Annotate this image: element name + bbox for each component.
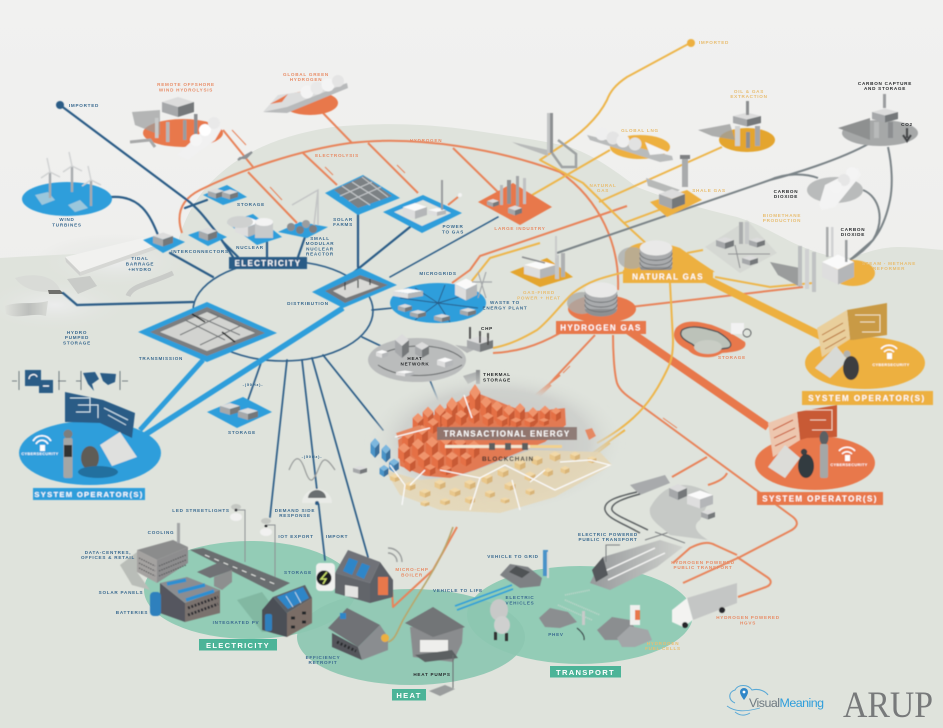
label: demand side response: RESPONSE [279, 513, 311, 518]
operator standing [64, 430, 72, 478]
orange system operator label: SYSTEM OPERATOR(S) [762, 494, 878, 504]
interconnector two [188, 228, 227, 246]
label: small modular nuclear reactor: NUCLEAR [306, 246, 334, 251]
label: imported gas: IMPORTED [699, 40, 729, 45]
label: natural gas pipe: NATURAL [589, 183, 617, 188]
label: electrolysis: ELECTROLYSIS [315, 153, 359, 158]
lower storage [207, 397, 272, 428]
label: carbon dioxide right: DIOXIDE [841, 232, 865, 237]
small marine turbine [238, 152, 252, 160]
label: storage: STORAGE [237, 202, 265, 207]
tower and pipeline [512, 113, 576, 167]
carbon dioxide ship [807, 167, 863, 210]
streetlight one [230, 504, 245, 562]
label: hydrogen storage: STORAGE [718, 355, 746, 360]
label: power to gas: POWER [442, 224, 464, 229]
teal zone: electricity [144, 541, 356, 639]
network: hydrogen lines [179, 113, 803, 607]
solar building [150, 562, 233, 622]
label: lower storage: STORAGE [228, 430, 256, 435]
label: gas fired power: POWER + HEAT [517, 295, 561, 300]
label: vehicle to life: VEHICLE TO LIFE [433, 588, 483, 593]
panel: orange system operator [755, 405, 875, 490]
hydrogen storage pond [674, 322, 751, 357]
panel: yellow system operator [805, 303, 925, 389]
label: electric public transport: ELECTRIC POWERED [578, 532, 638, 537]
electricity grid label [229, 257, 307, 269]
label: electric public transport: PUBLIC TRANSPORT [579, 537, 637, 542]
label: global green hydrogen: HYDROGEN [290, 77, 322, 82]
large industry [478, 176, 552, 225]
thermal storage [463, 370, 480, 384]
label: hydrogen HGVs: HYDROGEN POWERED [716, 615, 780, 620]
label: imported electricity: IMPORTED [69, 103, 99, 108]
label: steam methane reformer: REFORMER [873, 266, 905, 271]
cybersecurity icon [839, 447, 855, 461]
operator standing [820, 431, 828, 478]
label: large industry: LARGE INDUSTRY [494, 226, 546, 231]
storage diamond [203, 185, 247, 205]
label: LED streetlights: LED STREETLIGHTS [172, 508, 230, 513]
electric train [558, 527, 685, 620]
label: electric vehicles: VEHICLES [506, 600, 534, 605]
label: data centres: OFFICES & RETAIL [81, 555, 135, 560]
label: 50Hz upper: -(50Hz)- [243, 382, 263, 387]
label: batteries: BATTERIES [116, 610, 148, 615]
label: carbon capture: CARBON CAPTURE [858, 81, 912, 86]
label: carbon dioxide right: CARBON [841, 227, 865, 232]
micro CHP pipes [388, 527, 453, 642]
efficiency retrofit house [328, 608, 389, 660]
microgrids [390, 283, 486, 323]
panel: transactional energy city [353, 370, 625, 514]
label: solar panels: SOLAR PANELS [99, 590, 143, 595]
label: PHEV: PHEV [548, 632, 564, 637]
label: demand side response: DEMAND SIDE [275, 508, 315, 513]
label: waste to energy: WASTE TO [490, 300, 520, 305]
heat network [368, 334, 478, 382]
carbon capture and storage [838, 94, 918, 146]
logo: VisualMeaning [727, 686, 824, 715]
teal label: electricity [199, 639, 277, 650]
blue buildings [353, 438, 399, 477]
label: nuclear: NUCLEAR [236, 245, 264, 250]
label: natural gas pipe: GAS [597, 188, 609, 193]
hydrogen gas label: HYDROGEN GAS [560, 324, 642, 332]
yellow system operator label [802, 391, 933, 405]
operator desk [100, 432, 137, 466]
label: CHP: CHP [481, 326, 493, 331]
CHP [467, 327, 493, 352]
smokey heat source [490, 599, 510, 641]
teal label: electricity: ELECTRICITY [206, 641, 270, 650]
label: thermal storage: THERMAL [483, 372, 511, 377]
icon: world map [76, 371, 128, 391]
label: solar farms: SOLAR [333, 217, 353, 222]
icon: wifi [388, 548, 402, 562]
label: biomethane: PRODUCTION [763, 218, 801, 223]
teal label: transport [550, 666, 621, 678]
operator wall screens [65, 392, 135, 438]
data centres building [120, 523, 188, 590]
label: hydro pumped storage: PUMPED [65, 335, 89, 340]
orange district base [398, 392, 566, 478]
yellow district base [385, 450, 612, 513]
label: CO2: CO2 [901, 122, 913, 127]
road markings [205, 555, 277, 585]
operator at desk [815, 346, 848, 378]
label: hydrogen: HYDROGEN [410, 138, 442, 143]
biomethane production [705, 220, 777, 273]
label: data centres: DATA-CENTRES, [85, 550, 131, 555]
teal label: heat [392, 689, 426, 700]
label: micro CHP boiler: MICRO-CHP [395, 567, 429, 572]
label: 50Hz lower: -(50Hz)- [302, 454, 322, 459]
icon: imported gas [687, 39, 695, 47]
blockchain text: BLOCKCHAIN [482, 456, 534, 463]
frequency wave and gauge [289, 459, 335, 505]
shale gas [646, 155, 702, 217]
label: solar farms: FARMS [333, 222, 353, 227]
label: IoT export: IOT EXPORT [278, 534, 314, 539]
network: carbon dioxide lines [557, 143, 892, 260]
label: carbon capture: AND STORAGE [864, 86, 906, 91]
oil and gas extraction [698, 101, 775, 152]
label: global green hydrogen: GLOBAL GREEN [283, 72, 329, 77]
natural gas label: NATURAL GAS [632, 272, 704, 282]
small modular nuclear reactor [278, 190, 328, 238]
steam methane reformer [770, 227, 875, 292]
screens [797, 405, 837, 440]
label: power to gas: TO GAS [442, 230, 464, 234]
integrated PV house [237, 585, 312, 637]
label: heat network: NETWORK [401, 361, 429, 366]
tidal barrage [65, 238, 157, 276]
label: gas fired power: GAS-FIRED [523, 290, 555, 295]
global LNG ship [587, 128, 673, 162]
gas fired power plant [510, 236, 573, 287]
label: shale gas: SHALE GAS [692, 188, 726, 193]
label: tidal barrage: BARRAGE [126, 262, 154, 267]
teal zone: heat [297, 589, 525, 685]
upper train and tracks [605, 475, 670, 533]
interconnector one [143, 232, 185, 253]
transactional energy label: TRANSACTIONAL ENERGY [444, 430, 570, 438]
yellow buildings [390, 452, 596, 506]
teal label: transport: TRANSPORT [556, 668, 615, 677]
transactional energy label [437, 427, 577, 440]
road [190, 548, 290, 592]
label: remote offshore: REMOTE OFFSHORE [157, 82, 215, 87]
label: integrated PV: INTEGRATED PV [213, 620, 260, 625]
teal zone: transport [467, 566, 693, 664]
label: tidal barrage: TIDAL [131, 256, 149, 261]
label: heat network: HEAT [407, 356, 423, 361]
cybersecurity text: CYBERSECURITY [872, 362, 910, 367]
label: hydro pumped storage: STORAGE [63, 340, 91, 345]
label: hydrogen public transport: HYDROGEN POWERED [671, 560, 735, 565]
nuclear [227, 214, 282, 245]
network: electricity lines [60, 105, 498, 560]
cybersecurity text: CYBERSECURITY [830, 462, 868, 467]
yellow system operator label: SYSTEM OPERATOR(S) [808, 394, 926, 403]
label: import: IMPORT [326, 534, 348, 539]
label: oil and gas: OIL & GAS [734, 89, 764, 94]
PHEV car [539, 608, 585, 640]
solar farms [325, 175, 400, 215]
label: tidal barrage: +HYDRO [128, 267, 152, 272]
label: distribution: DISTRIBUTION [287, 301, 329, 306]
wind turbines [22, 152, 112, 216]
label: small modular nuclear reactor: SMALL [310, 236, 330, 241]
white roads [390, 395, 610, 510]
label: wind turbines: TURBINES [52, 222, 82, 228]
network: natural gas lines [467, 43, 823, 470]
label: hydro pumped storage: HYDRO [67, 330, 87, 335]
electricity grid label: ELECTRICITY [235, 259, 301, 268]
teal label: heat: HEAT [396, 691, 422, 700]
storage battery unit [316, 563, 335, 591]
vehicle to life link [455, 585, 513, 610]
hydrogen gas label [556, 321, 646, 334]
cybersecurity text: CYBERSECURITY [21, 451, 59, 456]
label: efficiency retrofit: EFFICIENCY [306, 655, 340, 660]
smart house [335, 550, 393, 603]
orange system operator label [757, 492, 883, 505]
cybersecurity icon [33, 436, 51, 451]
label: carbon dioxide left: CARBON [774, 189, 798, 194]
remote offshore wind hydrolysis [130, 97, 223, 160]
label: hydrogen HGVs: HGVS [740, 620, 756, 626]
label: global LNG: GLOBAL LNG [621, 128, 659, 133]
logo: ARUP: ARUP [843, 685, 933, 726]
hydrogen HGV [672, 583, 737, 628]
distribution substation [312, 268, 397, 308]
label: wind turbines: WIND [59, 217, 75, 222]
screens [847, 303, 887, 340]
global green hydrogen ship [263, 75, 348, 115]
label: efficiency retrofit: RETROFIT [309, 660, 337, 665]
transmission substation [138, 302, 277, 362]
orange buildings [396, 384, 596, 476]
logo: VisualMeaning: VisualMeaning [749, 696, 824, 710]
icon: imported electricity [56, 101, 64, 109]
label: micro CHP boiler: BOILER [401, 572, 423, 578]
label: cooling: COOLING [148, 530, 174, 535]
label: interconnectors: INTERCONNECTORS [171, 249, 229, 254]
natural gas tank [618, 240, 715, 275]
hydrogen trucks and road [650, 484, 715, 540]
label: microgrids: MICROGRIDS [419, 271, 457, 276]
label: carbon dioxide left: DIOXIDE [774, 194, 798, 199]
label: hydrogen public transport: PUBLIC TRANSPORT [674, 565, 732, 570]
heat pump house [405, 607, 465, 696]
label: electric vehicles: ELECTRIC [506, 595, 534, 600]
power to gas [383, 180, 462, 233]
label: small modular nuclear reactor: REACTOR [306, 252, 334, 257]
label: hydrogen fuel cells: HYDROGEN [647, 641, 679, 646]
label: remote offshore: WIND HYDROLYSIS [159, 87, 213, 92]
icon: weather data [12, 370, 66, 393]
label: heat pumps: HEAT PUMPS [413, 672, 451, 677]
cybersecurity icon [881, 345, 897, 359]
coastal mist and hydro landscape [0, 234, 195, 333]
label: waste to energy: ENERGY PLANT [483, 306, 527, 310]
label: home storage: STORAGE [284, 570, 312, 575]
label: thermal storage: STORAGE [483, 377, 511, 382]
hydrogen tank [567, 282, 636, 323]
label: transmission: TRANSMISSION [139, 356, 183, 361]
label: small modular nuclear reactor: MODULAR [306, 241, 334, 246]
blue system operator label: SYSTEM OPERATOR(S) [34, 490, 144, 499]
blockchain links [445, 443, 562, 450]
vehicle to grid car [500, 550, 549, 588]
streetlight two [260, 518, 275, 577]
natural gas label [623, 270, 713, 283]
hydrogen fuel cell cars [597, 605, 652, 647]
label: vehicle to grid: VEHICLE TO GRID [487, 554, 539, 559]
label: steam methane reformer: STEAM - METHANE [862, 261, 916, 266]
label: hydrogen fuel cells: FUEL CELLS [645, 646, 681, 651]
panel: blue system operator [19, 392, 161, 485]
operator at desk [768, 445, 800, 478]
label: oil and gas: EXTRACTION [730, 94, 768, 99]
waste to energy plant [455, 272, 492, 300]
label: biomethane: BIOMETHANE [763, 213, 801, 218]
